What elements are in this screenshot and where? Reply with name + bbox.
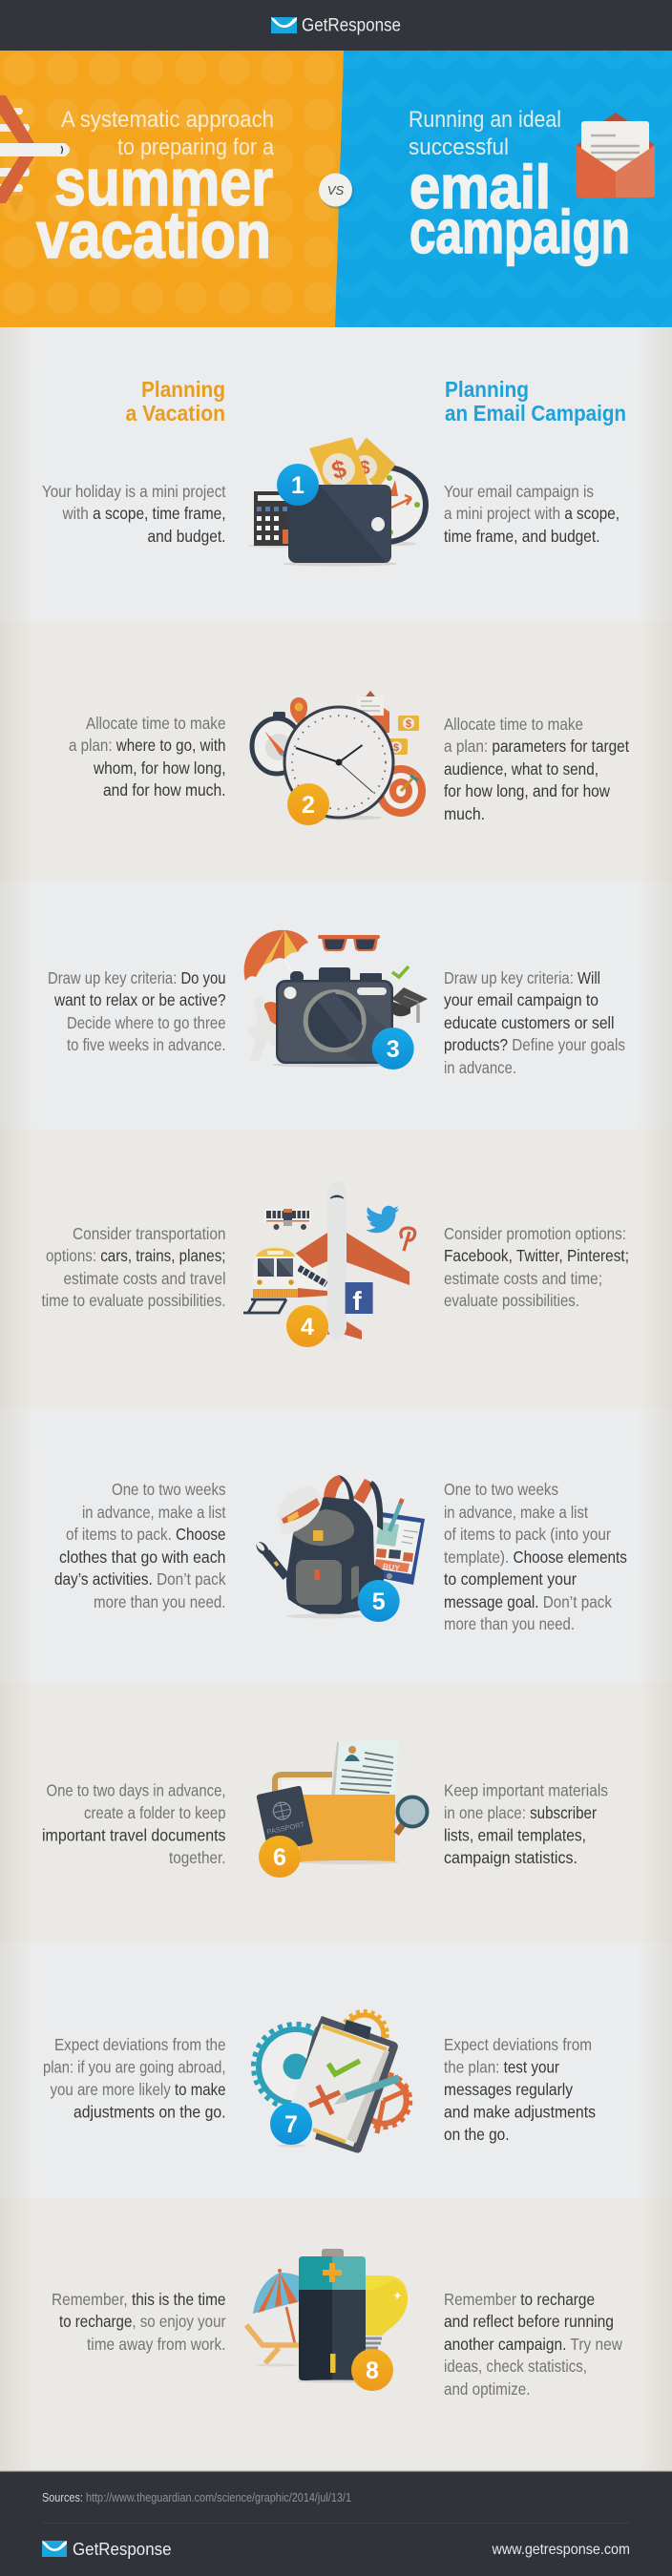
heading: planning a vacation: a Vacation xyxy=(126,401,225,426)
text: vacation step 2: and for how much. xyxy=(103,780,225,800)
hero heading: vacation: vacation xyxy=(36,197,271,272)
panel: step 3 criteria xyxy=(0,881,672,1129)
badge: number 8 xyxy=(351,2349,393,2391)
badge: number 1 xyxy=(277,464,319,506)
hero: email side xyxy=(335,51,672,327)
text: vacation step 1 xyxy=(42,482,226,546)
text: email step 6: lists, email templates, xyxy=(444,1826,586,1845)
text: email step 6: campaign statistics. xyxy=(444,1848,578,1867)
text: vacation step 4: estimate costs and travel xyxy=(63,1269,225,1288)
text: vacation step 5: in advance, make a list xyxy=(82,1503,226,1522)
heading: planning an email campaign: an Email Campaign xyxy=(445,401,626,426)
text: vacation step 1: with a scope, time frame, xyxy=(62,504,225,523)
badge: number 1: 1 xyxy=(291,472,304,499)
text: email step 4: Facebook, Twitter, Pinterest; xyxy=(444,1246,629,1265)
text: vacation step 6: create a folder to keep xyxy=(84,1803,225,1822)
text: vacation step 3 xyxy=(48,968,226,1054)
text: vacation step 6: together. xyxy=(169,1848,225,1867)
text: vacation step 5: day’s activities. Don’t pack xyxy=(54,1569,226,1589)
badge: number 4: 4 xyxy=(301,1314,314,1340)
text: vacation step 8 xyxy=(52,2290,226,2354)
text: email step 7: Expect deviations from xyxy=(444,2035,592,2054)
icon: GetResponse logo xyxy=(42,2541,67,2557)
text: email step 4 xyxy=(444,1224,629,1310)
panel: step 7 deviations xyxy=(0,1942,672,2198)
text: vacation step 3: to five weeks in advance. xyxy=(67,1035,225,1054)
text: vacation step 7 xyxy=(43,2035,225,2122)
text: vacation step 1: and budget. xyxy=(147,527,225,546)
text: vacation step 2: a plan: where to go, with xyxy=(69,736,225,755)
text: email step 3: educate customers or sell xyxy=(444,1013,615,1032)
badge: number 5: 5 xyxy=(372,1589,386,1615)
panel: step 6 documents xyxy=(0,1683,672,1942)
text: vacation step 3: Decide where to go three xyxy=(67,1013,225,1032)
icon: folder, passport, resume, magnifier: PASSPORT xyxy=(266,1819,305,1837)
panel: step 2 time xyxy=(0,622,672,881)
text: vacation step 2: whom, for how long, xyxy=(93,758,225,778)
hero heading: email xyxy=(409,107,630,266)
text: email step 8 xyxy=(444,2290,622,2399)
text: email step 6 xyxy=(444,1780,608,1867)
icon: folder, passport, resume, magnifier xyxy=(256,1740,428,1878)
text: email step 8: and optimize. xyxy=(444,2379,531,2399)
hero: vacation side xyxy=(0,51,344,327)
panel: step 4 transport xyxy=(0,1129,672,1407)
icon: backpack, hat, flashlight, tablet: BUY xyxy=(382,1561,401,1573)
vs badge: VS xyxy=(327,183,344,197)
text: email step 4: estimate costs and time; xyxy=(444,1269,602,1288)
text: email step 8: another campaign. Try new xyxy=(444,2335,622,2354)
hero heading: email: email xyxy=(410,153,551,221)
text: email step 5: in advance, make a list xyxy=(444,1503,588,1522)
badge: number 7: 7 xyxy=(284,2111,298,2138)
text: vacation step 8: time away from work. xyxy=(87,2335,225,2354)
text: vacation step 2: Allocate time to make xyxy=(86,714,225,733)
text: email step 8: ideas, check statistics, xyxy=(444,2357,587,2376)
text: vacation step 4: time to evaluate possibilities. xyxy=(42,1291,225,1310)
heading: planning a vacation xyxy=(126,377,225,426)
text: vacation step 7: plan: if you are going abroad, xyxy=(43,2057,225,2076)
badge: number 4 xyxy=(286,1305,328,1347)
text: vacation step 5: clothes that go with each xyxy=(59,1548,225,1567)
text: email step 5: template). Choose elements xyxy=(444,1548,627,1567)
text: vacation step 4 xyxy=(42,1224,225,1310)
text: vacation step 5: of items to pack. Choose xyxy=(66,1525,225,1544)
icon: clock, compass, target: $ xyxy=(406,718,411,730)
badge: number 7 xyxy=(270,2103,312,2145)
text: email step 4: Consider promotion options: xyxy=(444,1224,626,1243)
hero heading: vacation: A systematic approach xyxy=(61,107,274,133)
text: vacation step 5: more than you need. xyxy=(94,1592,225,1611)
icon: wallet, calculator, cash: $ xyxy=(359,458,370,479)
panel: step 8 recharge xyxy=(0,2198,672,2470)
text: vacation step 5: One to two weeks xyxy=(112,1480,226,1499)
text: email step 2 xyxy=(444,715,629,823)
hero heading: vacation: to preparing for a xyxy=(117,135,275,160)
text: email step 3: in advance. xyxy=(444,1058,516,1077)
text: email step 4: evaluate possibilities. xyxy=(444,1291,579,1310)
text: email step 7: the plan: test your xyxy=(444,2057,559,2076)
text: email step 3 xyxy=(444,968,625,1077)
icon: wallet, calculator, cash: $ xyxy=(328,454,349,485)
icon: wallet, calculator, cash xyxy=(248,439,426,567)
icon: plane, train, bus, social logos: f xyxy=(352,1286,362,1316)
text: vacation step 1: Your holiday is a mini project xyxy=(42,482,226,501)
panel: step 5 packing xyxy=(0,1407,672,1683)
vs badge xyxy=(319,174,354,209)
text: vacation step 4: Consider transportation xyxy=(73,1224,225,1243)
text: email step 8: and reflect before running xyxy=(444,2312,614,2331)
badge: number 6 xyxy=(259,1836,301,1878)
heading: planning an email campaign xyxy=(445,377,626,426)
text: vacation step 7: you are more likely to make xyxy=(50,2080,225,2099)
text: vacation step 7: adjustments on the go. xyxy=(74,2103,225,2122)
badge: number 8: 8 xyxy=(366,2358,379,2384)
text: vacation step 6: important travel documents xyxy=(42,1826,226,1845)
text: email step 5: to complement your xyxy=(444,1569,577,1589)
text: email step 6: in one place: subscriber xyxy=(444,1803,597,1822)
text: email step 5: message goal. Don’t pack xyxy=(444,1592,612,1611)
text: email step 2: Allocate time to make xyxy=(444,715,583,734)
badge: number 2 xyxy=(287,783,329,825)
text: email step 1 xyxy=(444,482,620,546)
badge: number 3 xyxy=(372,1028,414,1070)
icon: envelope xyxy=(577,113,655,197)
text: email step 6: Keep important materials xyxy=(444,1780,608,1799)
text: vacation step 6 xyxy=(42,1780,226,1867)
text: email step 7: on the go. xyxy=(444,2125,510,2144)
icon: GetResponse logo xyxy=(271,17,297,33)
text: email step 3: products? Define your goals xyxy=(444,1035,625,1054)
hero heading: vacation xyxy=(36,107,275,272)
text: vacation step 3: want to relax or be active? xyxy=(53,990,226,1009)
icon: clock, compass, target xyxy=(252,691,426,825)
brand name: GetResponse xyxy=(302,15,401,36)
text: email step 7: messages regularly xyxy=(444,2080,573,2099)
text: email step 7: and make adjustments xyxy=(444,2103,596,2122)
text: email step 2: for how long, and for how xyxy=(444,781,610,800)
heading: planning a vacation: Planning xyxy=(141,377,225,402)
footer xyxy=(0,2470,672,2576)
text: email step 7 xyxy=(444,2035,596,2144)
icon: camera, umbrella, sunglasses, graduation cap xyxy=(244,930,428,1070)
icon: battery, beach chair, light bulb xyxy=(246,2249,408,2391)
text: email step 5: more than you need. xyxy=(444,1614,575,1633)
text: vacation step 8: to recharge, so enjoy your xyxy=(59,2312,226,2331)
text: vacation step 3: Draw up key criteria: Do you xyxy=(48,968,225,987)
text: email step 1: time frame, and budget. xyxy=(444,527,599,546)
hero heading: email: Running an ideal xyxy=(409,107,561,133)
text: vacation step 7: Expect deviations from the xyxy=(54,2035,225,2054)
heading: planning an email campaign: Planning xyxy=(445,377,529,402)
badge: number 6: 6 xyxy=(273,1844,286,1871)
icon: gears and clipboard xyxy=(254,2011,410,2153)
text: vacation step 8: Remember, this is the time xyxy=(52,2290,225,2309)
website url: www.getresponse.com xyxy=(492,2542,630,2558)
icon: airplane xyxy=(0,95,70,216)
icon: backpack, hat, flashlight, tablet xyxy=(254,1475,425,1622)
text: email step 2: audience, what to send, xyxy=(444,759,598,779)
brand name: GetResponse xyxy=(73,2539,172,2559)
hero heading: email: successful xyxy=(409,135,509,160)
badge: number 2: 2 xyxy=(302,792,315,819)
text: email step 1: Your email campaign is xyxy=(444,482,594,501)
text: email step 3: your email campaign to xyxy=(444,990,598,1009)
hero heading: vacation: summer xyxy=(54,145,273,219)
text: email step 2: a plan: parameters for target xyxy=(444,737,629,756)
icon: plane, train, bus, social logos xyxy=(243,1181,415,1347)
text: email step 8: Remember to recharge xyxy=(444,2290,595,2309)
header bar xyxy=(0,0,672,51)
text: email step 2: much. xyxy=(444,804,485,823)
panel: step 1 budget xyxy=(0,327,672,622)
text: email step 5: One to two weeks xyxy=(444,1480,558,1499)
text: vacation step 6: One to two days in advance, xyxy=(46,1780,225,1799)
text: vacation step 4: options: cars, trains, planes; xyxy=(46,1246,225,1265)
sources line: Sources: http://www.theguardian.com/science/graphic/2014/jul/13/1 xyxy=(42,2491,351,2504)
text: vacation step 2 xyxy=(69,714,225,800)
text: email step 5 xyxy=(444,1480,627,1633)
badge: number 5 xyxy=(358,1580,400,1622)
text: email step 5: of items to pack (into your xyxy=(444,1525,611,1544)
badge: number 3: 3 xyxy=(387,1036,400,1063)
text: vacation step 5 xyxy=(54,1480,226,1611)
icon: clock, compass, target: $ xyxy=(393,742,399,754)
text: email step 3: Draw up key criteria: Will xyxy=(444,968,600,987)
text: email step 1: a mini project with a scope, xyxy=(444,504,620,523)
